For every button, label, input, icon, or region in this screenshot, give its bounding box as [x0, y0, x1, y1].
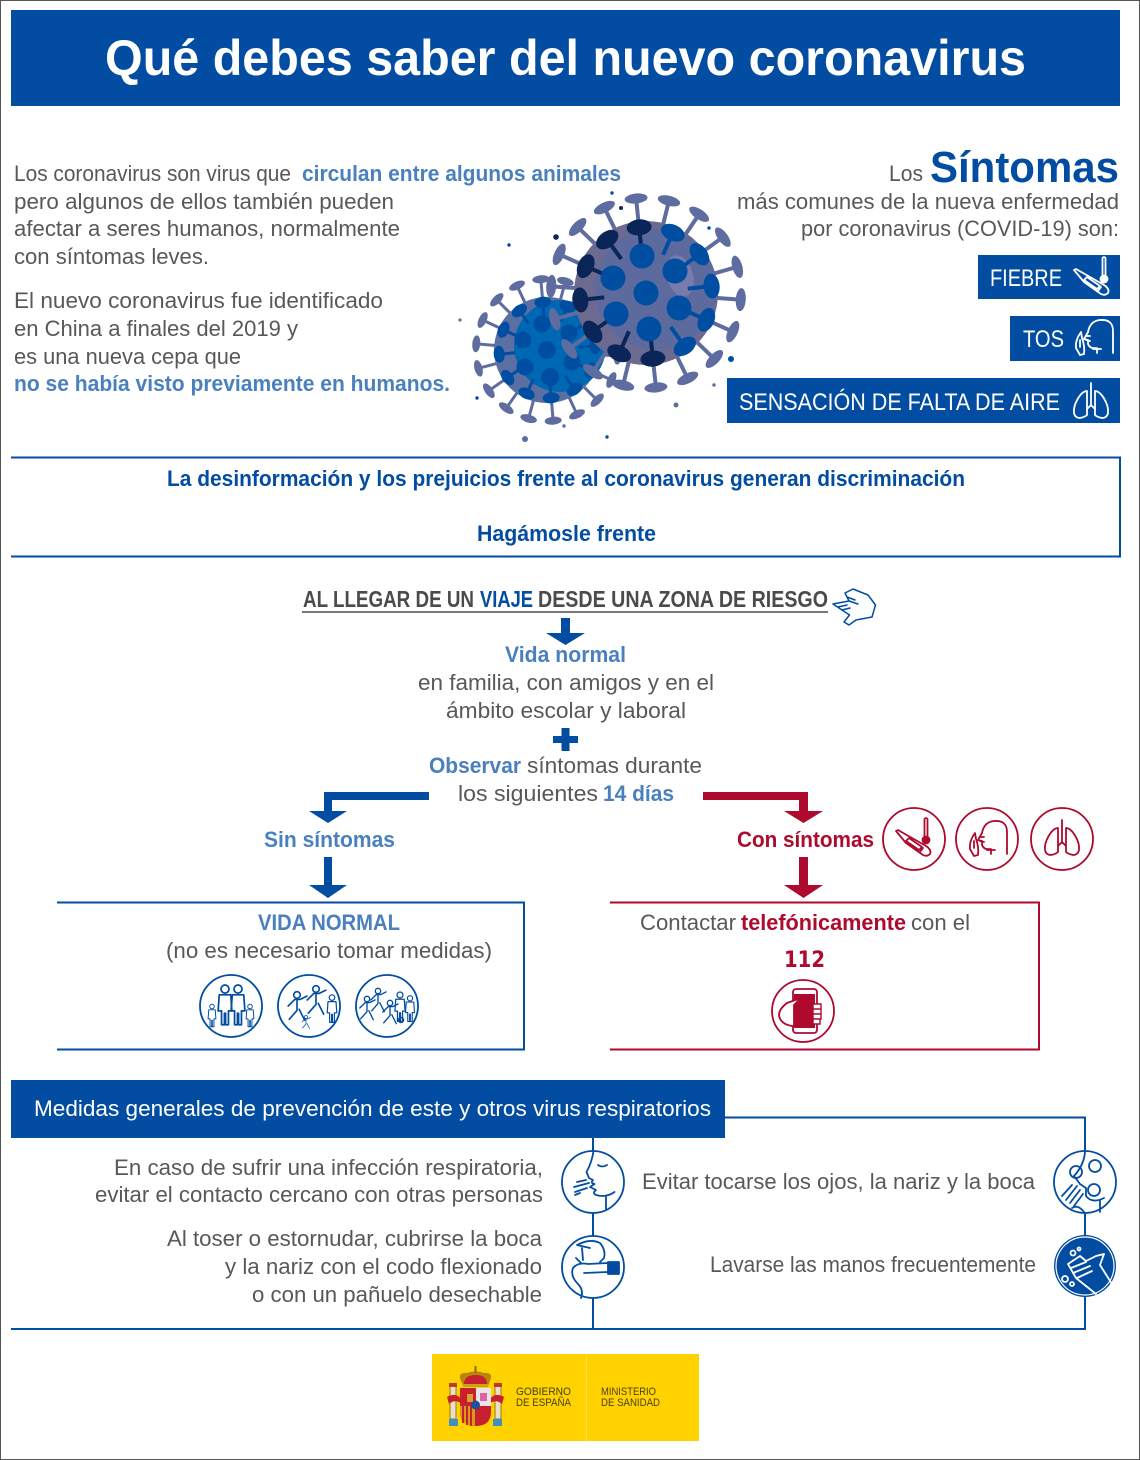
panel: discrimination message: La desinformación y los prejuicios frente al coronavirus generan discriminación [167, 466, 965, 491]
icon: pointing hand [833, 589, 876, 625]
text: observar: los siguientes [458, 781, 598, 806]
arrow down [546, 618, 585, 645]
symptoms heading: Los [889, 161, 923, 186]
text: vida normal [418, 642, 714, 723]
logo text: MINISTERIO [601, 1386, 656, 1398]
virus illustration [458, 191, 747, 442]
text: observar: Observar [429, 753, 521, 778]
label: sin síntomas: Sin síntomas [264, 827, 395, 852]
logo text: DE SANIDAD [601, 1397, 660, 1409]
intro text: afectar a seres humanos, normalmente [14, 216, 400, 241]
title banner [11, 10, 1120, 106]
arrow: to con síntomas [703, 792, 823, 823]
panel: symptoms call 112: con el [911, 910, 970, 935]
logo: gobierno de españa [432, 1354, 699, 1441]
arrow: red down [784, 857, 823, 898]
panel: no symptoms [57, 902, 524, 1050]
symptoms heading: más comunes de la nueva enfermedad [737, 189, 1119, 214]
panel: discrimination message: Hagámosle frente [477, 521, 656, 546]
arrow: to sin síntomas [309, 792, 429, 823]
symptom: tos [1010, 316, 1120, 361]
symptom: tos: TOS [1023, 326, 1064, 353]
prevention heading [11, 1080, 725, 1138]
panel: symptoms call 112: 112 [784, 948, 825, 973]
panel: no symptoms: VIDA NORMAL [258, 910, 400, 935]
symptom: fiebre: FIEBRE [990, 265, 1062, 292]
panel: symptoms call 112: Contactar [640, 910, 736, 935]
tip: cough into elbow: y la nariz con el codo flexionado [225, 1254, 542, 1279]
logo text: DE ESPAÑA [516, 1396, 572, 1409]
text: observar: 14 días [603, 781, 674, 806]
logo text: GOBIERNO [516, 1386, 571, 1398]
tip: cough into elbow [167, 1226, 624, 1307]
tip: wash hands [710, 1235, 1116, 1297]
symptom: falta de aire: SENSACIÓN DE FALTA DE AIRE [739, 389, 1060, 416]
tip: avoid close contact: evitar el contacto cercano con otras personas [95, 1182, 543, 1207]
logo text [516, 1386, 660, 1409]
symptom: fiebre [978, 255, 1120, 299]
label: con síntomas: Con síntomas [737, 827, 874, 852]
intro text: con síntomas leves. [14, 244, 209, 269]
symptoms heading: Síntomas [930, 143, 1119, 192]
intro text: circulan entre algunos animales [302, 161, 621, 186]
arrow: blue down [309, 857, 347, 898]
red symptom icons [883, 808, 1093, 870]
intro text: Los coronavirus son virus que [14, 161, 291, 186]
tip: avoid touching face: Evitar tocarse los ojos, la nariz y la boca [642, 1169, 1036, 1194]
text: vida normal: ámbito escolar y laboral [446, 698, 686, 723]
panel: discrimination message [11, 458, 1120, 556]
intro text: El nuevo coronavirus fue identificado [14, 288, 383, 313]
text: observar [429, 753, 702, 806]
text: observar: síntomas durante [527, 753, 702, 778]
travel heading: VIAJE [480, 586, 533, 612]
prevention heading: Medidas generales de prevención de este y otros virus respiratorios [34, 1096, 711, 1121]
panel: symptoms call 112 [610, 902, 1039, 1050]
coat of arms [447, 1366, 504, 1426]
text: vida normal: Vida normal [505, 642, 626, 667]
title banner: Qué debes saber del nuevo coronavirus [105, 30, 1026, 86]
text: vida normal: en familia, con amigos y en el [418, 670, 714, 695]
tip: avoid close contact [95, 1151, 624, 1213]
plus sign [553, 728, 578, 751]
tip: wash hands: Lavarse las manos frecuentemente [710, 1252, 1036, 1277]
travel heading: DESDE UNA ZONA DE RIESGO [538, 586, 828, 612]
intro text: no se había visto previamente en humanos. [14, 371, 450, 396]
intro text: pero algunos de ellos también pueden [14, 189, 394, 214]
panel: symptoms call 112: telefónicamente [741, 910, 906, 935]
travel heading: AL LLEGAR DE UN [303, 586, 474, 612]
tip: cough into elbow: Al toser o estornudar, cubrirse la boca [167, 1226, 543, 1251]
tip: cough into elbow: o con un pañuelo desechable [252, 1282, 542, 1307]
travel heading [302, 586, 828, 612]
intro text [14, 161, 621, 396]
panel: prevention frame [11, 1118, 1085, 1329]
intro text: es una nueva cepa que [14, 344, 241, 369]
tip: avoid close contact: En caso de sufrir una infección respiratoria, [114, 1155, 543, 1180]
symptoms heading: por coronavirus (COVID-19) son: [801, 216, 1119, 241]
intro text: en China a finales del 2019 y [14, 316, 298, 341]
panel: no symptoms: (no es necesario tomar medidas) [166, 938, 492, 963]
symptoms heading [737, 143, 1119, 241]
tip: avoid touching face [642, 1151, 1116, 1213]
symptom: falta de aire [727, 378, 1120, 423]
